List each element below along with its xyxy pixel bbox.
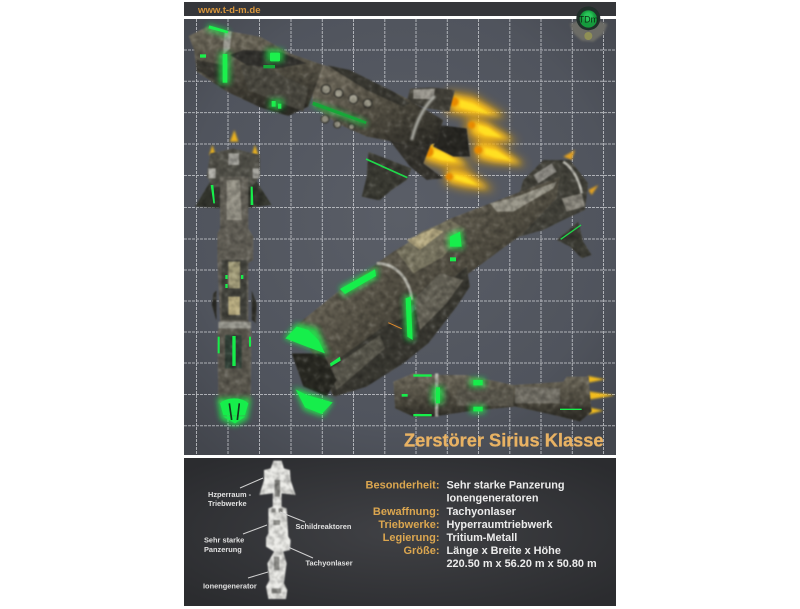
- specification labels: Legierung:: [383, 532, 440, 544]
- blueprint grid panel: [184, 19, 616, 455]
- nose cutaway: [292, 353, 337, 397]
- title: Zerstörer Sirius Klasse: [404, 430, 604, 450]
- schematic labels and leader lines: Tachyonlaser: [306, 559, 353, 568]
- forward hull: [297, 262, 470, 397]
- thrusters: [209, 130, 258, 155]
- green glow lights: [211, 185, 253, 426]
- logo badge: [570, 6, 607, 42]
- aft hull with armour rivets: [311, 65, 443, 147]
- green lights: [402, 374, 582, 416]
- specification labels: [366, 480, 440, 557]
- engine block: [207, 148, 260, 187]
- schematic labels and leader lines: [203, 478, 353, 591]
- thrusters: [588, 376, 615, 414]
- ship: perspective view from above: [189, 24, 527, 200]
- engine ring: [412, 96, 435, 140]
- ship: front-facing diagonal view: [284, 150, 598, 417]
- ship: side view: [393, 373, 615, 422]
- orange light: [388, 323, 402, 329]
- specification values: [446, 480, 597, 570]
- schematic labels and leader lines: Triebwerke: [208, 499, 247, 508]
- specification labels: Bewaffnung:: [373, 506, 440, 518]
- schematic labels and leader lines: Sehr starke: [204, 535, 244, 544]
- website url: www.t-d-m.de: [197, 5, 261, 16]
- specification labels: Besonderheit:: [366, 480, 440, 492]
- engine section: [513, 160, 588, 237]
- specification values: Tritium-Metall: [446, 532, 517, 544]
- ship: top-down vertical view: [195, 130, 272, 426]
- specification labels: Triebwerke:: [378, 519, 440, 531]
- specification values: Länge x Breite x Höhe: [446, 545, 561, 557]
- spine hull: [212, 177, 257, 403]
- thrusters: [563, 150, 598, 195]
- schematic labels and leader lines: Panzerung: [204, 545, 242, 554]
- forward hull: [189, 26, 323, 116]
- engine pods: [387, 87, 470, 180]
- rear fin: [557, 222, 592, 258]
- header bar: [184, 2, 616, 16]
- schematic labels and leader lines: Hzperraum -: [208, 490, 252, 499]
- wings: [195, 173, 272, 208]
- specification panel: [184, 458, 616, 606]
- specification values: 220.50 m x 56.20 m x 50.80 m: [446, 558, 597, 570]
- green glow lights: [200, 24, 367, 126]
- specification values: Sehr starke Panzerung: [446, 480, 565, 492]
- specification values: Ionengeneratoren: [446, 492, 538, 504]
- schematic labels and leader lines: Ionengenerator: [203, 582, 257, 591]
- specification labels: Größe:: [403, 545, 440, 557]
- specification values: Hyperraumtriebwerk: [446, 519, 553, 531]
- green glow panels: [284, 230, 463, 417]
- specification values: Tachyonlaser: [446, 506, 517, 518]
- rear fin: [362, 152, 412, 200]
- mid hull: [377, 177, 560, 307]
- hull: [393, 373, 592, 422]
- engine flames: [422, 92, 527, 191]
- ship schematic: [259, 461, 296, 599]
- logo badge: TDm: [579, 14, 598, 24]
- schematic labels and leader lines: Schildreaktoren: [296, 522, 352, 531]
